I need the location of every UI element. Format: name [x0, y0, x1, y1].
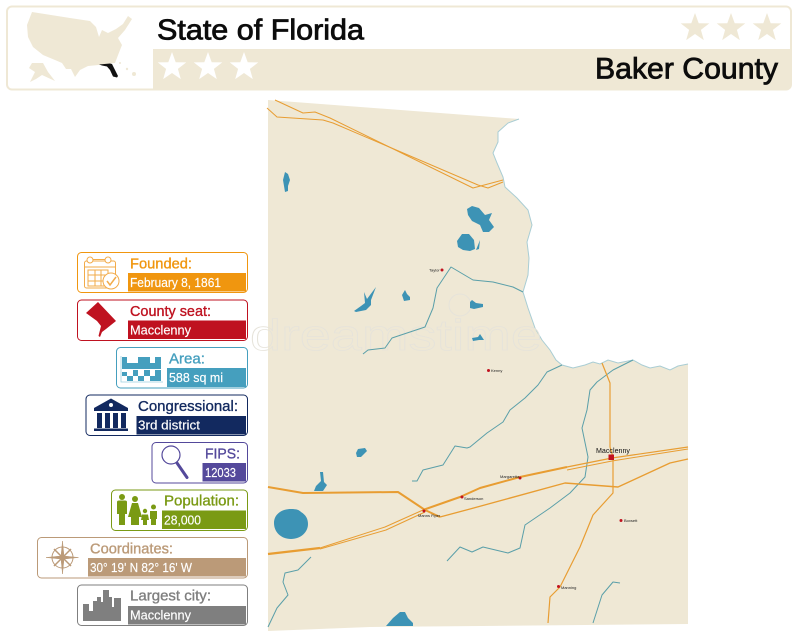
icon: calendar	[84, 257, 119, 289]
icon: area grid	[121, 356, 163, 382]
lakes	[274, 172, 494, 626]
city: Margaretta: Margaretta	[500, 474, 520, 479]
label: Population:	[164, 492, 239, 510]
panel: FIPS	[152, 442, 248, 483]
city: Macclenny county seat	[596, 446, 630, 460]
value: 28,000	[164, 512, 201, 528]
county east border	[493, 119, 688, 370]
panel: population	[112, 490, 248, 530]
value: Macclenny	[130, 608, 191, 622]
title: state: State of Florida	[157, 14, 365, 46]
header banner	[7, 6, 791, 90]
icon: white stars	[158, 52, 258, 79]
watermark	[250, 294, 542, 360]
icon: city skyline	[83, 590, 121, 621]
label: Congressional:	[138, 398, 238, 415]
label: Largest city:	[130, 588, 211, 604]
city: Manns Fiper	[418, 510, 441, 518]
value: 588 sq mi	[169, 370, 223, 385]
icon: county seat shape	[86, 302, 116, 337]
icon: capitol building	[94, 398, 128, 431]
value: 12033	[205, 465, 236, 480]
label: Founded:	[130, 256, 192, 272]
city: Taylor: Taylor	[429, 268, 440, 272]
city: Manns Fiper: Manns Fiper	[418, 513, 441, 518]
label: Coordinates:	[90, 540, 173, 558]
icon: family	[117, 494, 157, 525]
roads	[267, 100, 688, 623]
panel: congressional	[86, 395, 248, 436]
panel: county seat	[78, 300, 248, 340]
icon: US map with Florida highlighted	[27, 12, 136, 82]
label: Area:	[169, 350, 205, 368]
city: Macclenny county seat: Macclenny	[596, 446, 630, 455]
city: Kenny: Kenny	[491, 368, 502, 373]
city: Sanderson: Sanderson	[464, 496, 483, 501]
panel: coordinates	[38, 538, 248, 578]
panel: founded	[78, 252, 248, 292]
value: 30° 19' N 82° 16' W	[90, 560, 193, 575]
city: Manning: Manning	[561, 585, 576, 590]
value: 3rd district	[138, 418, 200, 432]
icon: magnifier	[162, 446, 187, 478]
panel: area	[116, 348, 248, 388]
map: Baker County	[250, 100, 688, 631]
value: Macclenny	[130, 322, 191, 338]
label: FIPS:	[205, 446, 240, 462]
title: county: Baker County	[595, 52, 778, 86]
city: Boxsett: Boxsett	[624, 518, 638, 523]
icon: compass rose	[46, 541, 78, 574]
rivers	[268, 267, 633, 627]
value: February 8, 1861	[130, 275, 221, 290]
watermark: dreamstime	[250, 311, 542, 360]
icon: beige stars	[681, 13, 781, 40]
panel: largest city	[78, 585, 248, 626]
label: County seat:	[130, 303, 211, 320]
county land	[268, 100, 688, 631]
